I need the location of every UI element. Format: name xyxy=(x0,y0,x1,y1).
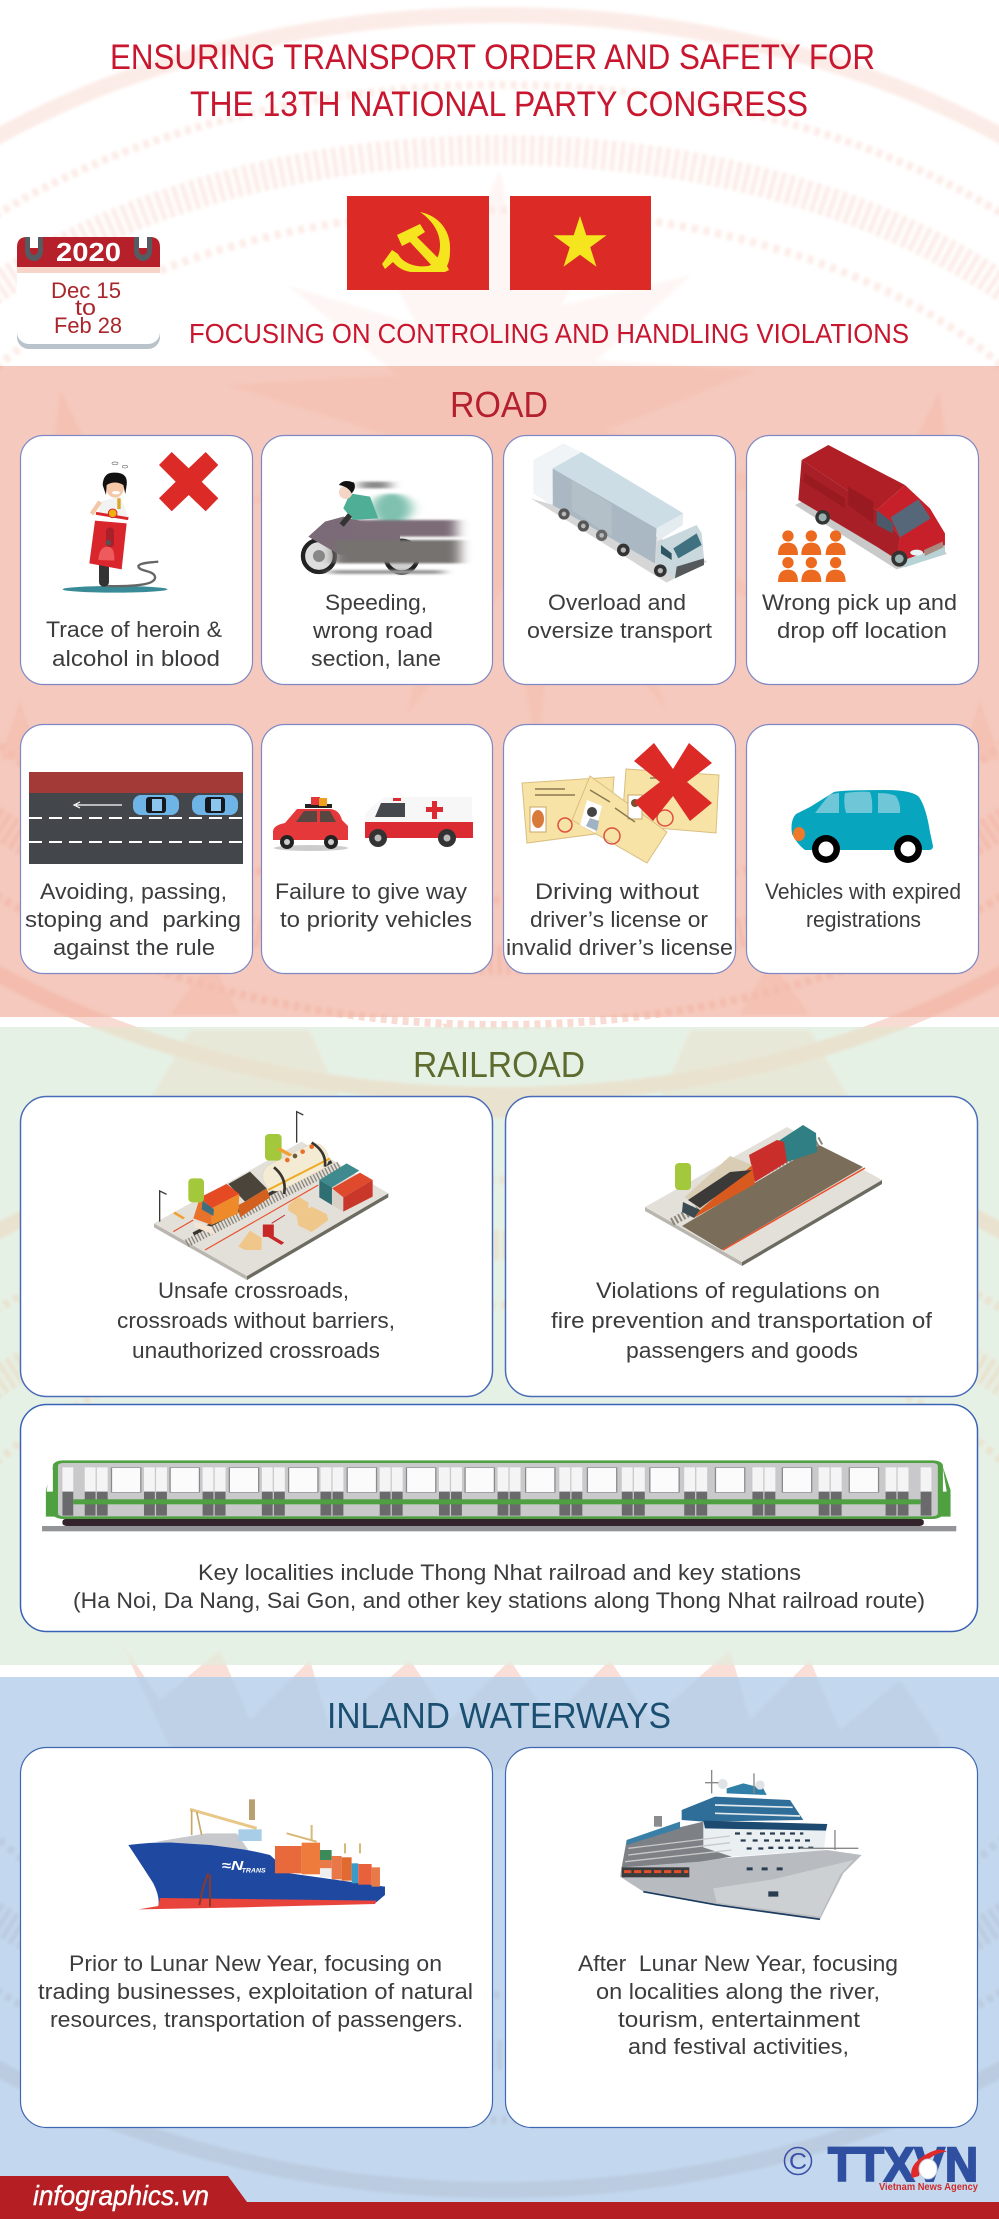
text: fire prevention: fire prevention and transportation of xyxy=(551,1308,933,1333)
card: overload xyxy=(504,436,736,684)
logo: TTXVN: TTXVN xyxy=(828,2139,978,2192)
icon: red van and passengers xyxy=(778,445,947,582)
text: license xyxy=(506,879,733,960)
text: avoiding: stoping and parking xyxy=(25,907,241,932)
icon: road with two cars xyxy=(29,772,243,864)
text: unsafe crossroads: unauthorized crossroads xyxy=(132,1338,380,1363)
card: avoiding and passing xyxy=(20,724,252,974)
text: after Lunar New Year: After Lunar New Year, focusing xyxy=(578,1951,898,1976)
text: avoiding xyxy=(25,879,241,960)
text: license: Driving without xyxy=(535,879,700,904)
footer bar xyxy=(0,2176,999,2219)
icon: red cross mark xyxy=(634,743,712,821)
card: key localities xyxy=(20,1404,978,1632)
text: license: driver’s license or xyxy=(530,907,708,932)
text: avoiding: Avoiding, passing, xyxy=(40,879,227,904)
card: driver's license xyxy=(504,724,736,974)
text: fire prevention: Violations of regulations on xyxy=(596,1278,880,1303)
card: before Lunar New Year xyxy=(20,1748,492,2128)
icon: isometric train on tracks xyxy=(645,1125,882,1266)
icon: oversize truck xyxy=(531,443,707,583)
text: license: invalid driver’s license xyxy=(506,935,733,960)
text: registrations: Vehicles with expired xyxy=(765,879,961,904)
text: unsafe crossroads xyxy=(117,1278,395,1363)
text: avoiding: against the rule xyxy=(53,935,215,960)
card: heroin and alcohol xyxy=(20,436,252,684)
text: before Lunar New Year: Prior to Lunar New Year, focusing on xyxy=(69,1951,442,1976)
heading: road: ROAD xyxy=(450,384,548,425)
text: key localities xyxy=(73,1560,925,1613)
calendar: date range: to xyxy=(75,295,96,320)
title xyxy=(110,38,875,124)
text: speeding xyxy=(311,590,441,671)
calendar: date range: 2020 xyxy=(56,237,121,267)
icon: container ship xyxy=(128,1799,385,1909)
text: heroin: Trace of heroin & xyxy=(46,617,222,642)
heading: inland waterways: INLAND WATERWAYS xyxy=(327,1695,671,1736)
text: after Lunar New Year: tourism, entertainment xyxy=(618,2007,861,2032)
card: unsafe crossroads xyxy=(20,1096,492,1396)
text: heroin: alcohol in blood xyxy=(52,646,220,671)
calendar: date range xyxy=(17,237,160,349)
panel: inland waterways xyxy=(20,1695,978,2128)
calendar: date range: Dec 15 xyxy=(51,278,121,303)
calendar: date range: Feb 28 xyxy=(54,313,122,338)
icon: green passenger train xyxy=(42,1462,956,1531)
icon: copyright xyxy=(784,2148,812,2174)
text: after Lunar New Year xyxy=(578,1951,898,2059)
icon: drunk scooter rider xyxy=(63,462,167,593)
card: expired registrations xyxy=(746,724,978,974)
card: speeding xyxy=(262,436,492,684)
text: unsafe crossroads: crossroads without barriers, xyxy=(117,1308,395,1333)
icon: cruise ship xyxy=(620,1770,862,1919)
text: before Lunar New Year xyxy=(38,1951,473,2032)
text: speeding: section, lane xyxy=(311,646,441,671)
card: fire prevention xyxy=(506,1096,978,1396)
icon: ambulance xyxy=(365,797,473,847)
text: key localities: (Ha Noi, Da Nang, Sai Gon, and other key stations along Thong Nhat railroad route) xyxy=(73,1588,925,1613)
text: speeding: Speeding, xyxy=(325,590,427,615)
text: priority: Failure to give way xyxy=(275,879,468,904)
text: before Lunar New Year: resources, transportation of passengers. xyxy=(50,2007,463,2032)
panel: road xyxy=(20,384,978,974)
title: ENSURING TRANSPORT ORDER AND SAFETY FOR xyxy=(110,38,875,77)
heading: railroad: RAILROAD xyxy=(413,1044,585,1085)
text: overload: Overload and xyxy=(548,590,686,615)
text: wrong pick up: Wrong pick up and xyxy=(762,590,957,615)
logo: TTXVN: Vietnam News Agency xyxy=(879,2181,978,2193)
icon: teal car xyxy=(792,790,933,863)
text: after Lunar New Year: on localities along the river, xyxy=(596,1979,880,2004)
text: fire prevention xyxy=(551,1278,933,1363)
icon: copyright: C xyxy=(789,2148,807,2174)
text: heroin xyxy=(46,617,222,671)
text: after Lunar New Year: and festival activities, xyxy=(628,2034,849,2059)
text: registrations xyxy=(765,879,961,932)
text: before Lunar New Year: trading businesses, exploitation of natural xyxy=(38,1979,473,2004)
card: priority vehicles xyxy=(262,724,492,974)
text: overload xyxy=(527,590,713,643)
card: after Lunar New Year xyxy=(506,1748,978,2128)
icon: red car with siren xyxy=(273,797,348,851)
text: speeding: wrong road xyxy=(312,618,433,643)
text: registrations: registrations xyxy=(806,907,921,932)
icon: red cross mark xyxy=(159,452,218,511)
icon: isometric freight yard xyxy=(154,1112,388,1280)
icon: party flag xyxy=(347,196,489,290)
footer site name: infographics.vn xyxy=(33,2180,209,2211)
icon: speeding motorbike xyxy=(303,481,460,574)
icon: container ship: ≈N xyxy=(222,1858,244,1873)
icon: container ship: TRANS xyxy=(242,1868,266,1875)
text: unsafe crossroads: Unsafe crossroads, xyxy=(158,1278,349,1303)
icon: license documents xyxy=(522,769,719,863)
subtitle: FOCUSING ON CONTROLING AND HANDLING VIOLATIONS xyxy=(189,318,909,349)
text: priority: to priority vehicles xyxy=(280,907,472,932)
text: fire prevention: passengers and goods xyxy=(626,1338,858,1363)
card: wrong pick up xyxy=(746,436,978,684)
text: key localities: Key localities include Thong Nhat railroad and key stations xyxy=(198,1560,801,1585)
title: THE 13TH NATIONAL PARTY CONGRESS xyxy=(190,85,808,124)
text: wrong pick up xyxy=(762,590,957,643)
panel: railroad xyxy=(20,1044,978,1632)
text: overload: oversize transport xyxy=(527,618,713,643)
icon: national flag xyxy=(510,196,651,290)
text: priority xyxy=(275,879,472,932)
text: wrong pick up: drop off location xyxy=(777,618,947,643)
